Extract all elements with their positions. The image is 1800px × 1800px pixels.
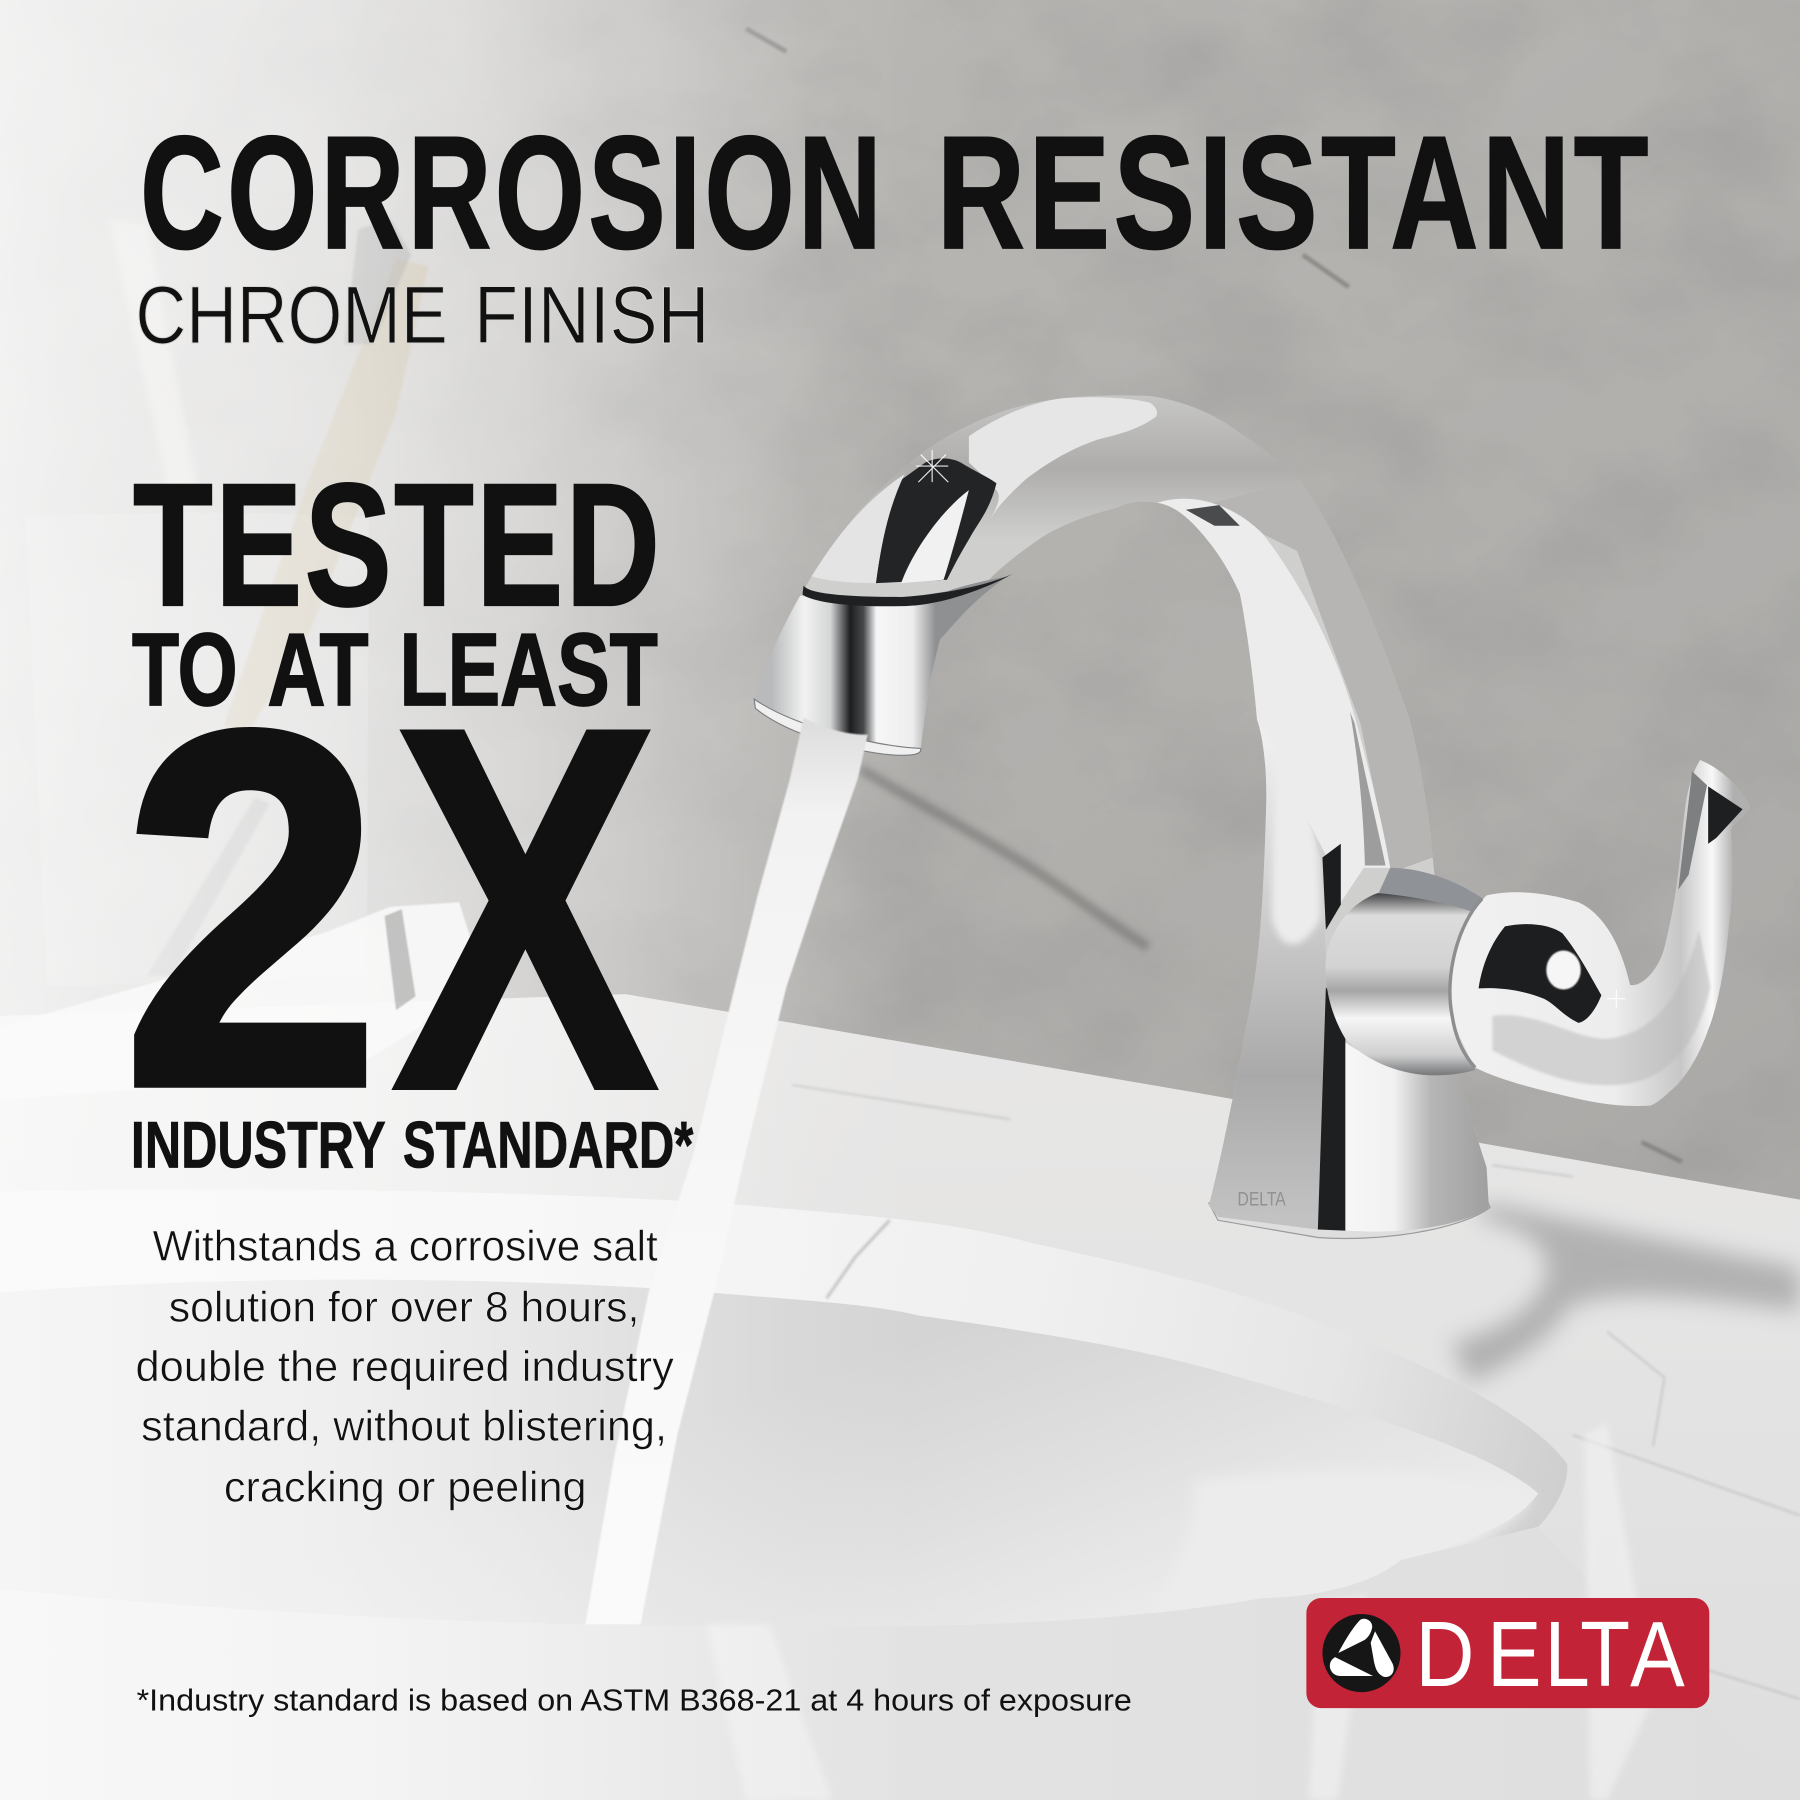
icon: Delta triangle — [1322, 1614, 1401, 1692]
white fade overlay — [0, 0, 918, 1800]
basin light patch — [1148, 1470, 1533, 1613]
stem reflection — [1272, 735, 1320, 944]
description text block: cracking or peeling — [224, 1464, 587, 1511]
counter shadow — [1452, 1203, 1800, 1383]
description text block: solution for over 8 hours, — [169, 1283, 639, 1330]
industry standard: INDUSTRY — [131, 1108, 386, 1181]
to at least: TO — [132, 611, 238, 727]
sparkles — [916, 450, 1626, 1008]
description text block: Withstands a corrosive salt — [153, 1222, 658, 1269]
to at least: AT — [267, 611, 368, 727]
ghost dark handle — [147, 798, 270, 976]
industry standard: STANDARD* — [403, 1108, 694, 1181]
under-basin counter — [0, 1527, 1800, 1800]
rim vein — [827, 1220, 890, 1298]
collar ring — [1450, 899, 1482, 1068]
nozzle — [754, 576, 1008, 750]
arch dark glint — [1186, 505, 1240, 526]
basin rim — [0, 1189, 1567, 1630]
cylinder top — [1378, 868, 1483, 918]
faucet base flange — [1209, 1198, 1490, 1238]
description text block: standard, without blistering, — [141, 1403, 667, 1450]
heading: corrosion resistant — [140, 104, 1652, 283]
counter veins — [792, 1085, 1800, 1699]
to at least: LEAST — [399, 611, 658, 727]
ghost glass — [25, 512, 370, 987]
handle cylinder — [1326, 893, 1475, 1075]
heading: corrosion resistant: CORROSION — [140, 104, 885, 283]
lever and knob — [1450, 760, 1751, 1106]
Delta logo — [1306, 1598, 1709, 1708]
2X: 2 — [122, 628, 381, 1192]
marble wall — [0, 0, 1800, 1217]
stem left panel — [1209, 720, 1329, 1229]
inner arch highlight — [1157, 499, 1390, 902]
2X — [122, 618, 662, 1198]
DELTA stamp on faucet: DELTA — [1238, 1188, 1286, 1210]
water stream — [585, 717, 868, 1624]
knob dark shadow — [1479, 924, 1601, 1023]
spout inner white reflection — [901, 490, 969, 583]
faucet reflections in counter — [706, 1423, 1653, 1800]
description text block — [135, 1222, 675, 1511]
footnote: *Industry standard is based on ASTM B368-21 at 4 hours of exposure — [137, 1682, 1132, 1717]
to at least — [132, 611, 658, 727]
basin bowl — [0, 1280, 1538, 1627]
spout left reflection — [812, 474, 905, 583]
spout right chrome — [1204, 480, 1433, 872]
spout dark reflection — [876, 458, 996, 583]
knob highlight — [1546, 951, 1581, 990]
subheading: chrome finish: CHROME — [135, 270, 448, 361]
subheading: chrome finish: FINISH — [474, 270, 709, 361]
description text block: double the required industry — [135, 1343, 675, 1390]
ghost tube — [0, 902, 475, 1100]
faucet silhouette — [754, 395, 1489, 1232]
aerator ring — [754, 699, 921, 755]
base right section — [1345, 1042, 1489, 1232]
logo background — [1306, 1598, 1709, 1708]
lever tip dark facets — [1678, 771, 1707, 890]
marble countertop — [0, 994, 1800, 1800]
industry standard — [131, 1108, 694, 1181]
ghost bamboo toothbrush — [224, 218, 428, 735]
spout top highlight — [969, 397, 1157, 520]
faucet — [754, 395, 1751, 1238]
2X: X — [390, 618, 662, 1198]
ghost white toothbrush — [109, 220, 201, 511]
logo wordmark: DELTA — [1415, 1602, 1685, 1706]
nozzle seam — [802, 574, 1012, 606]
tested: TESTED — [133, 447, 662, 642]
callout: tested to at least 2X — [122, 447, 694, 1198]
stem dark strips — [1322, 844, 1341, 930]
subheading: chrome finish — [135, 270, 709, 361]
lever underside shade — [1492, 930, 1710, 1085]
